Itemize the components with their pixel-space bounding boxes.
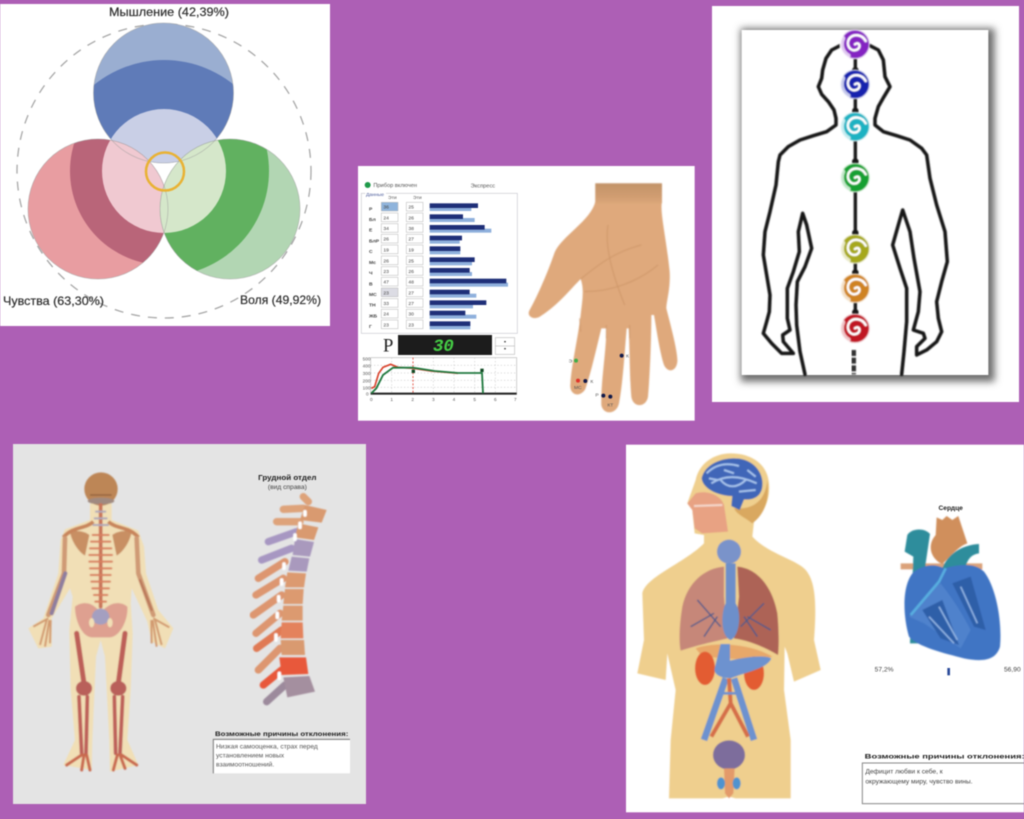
row labels: С — [369, 249, 373, 255]
heading: possible causes: Возможные причины отклонения: — [865, 753, 1024, 760]
text box: causes: установлением новых — [216, 753, 285, 760]
leg bones — [67, 633, 137, 770]
line chart: 5 — [473, 397, 476, 402]
bladder — [713, 740, 745, 770]
chakra: heart — [841, 163, 869, 192]
input values: 25 — [408, 205, 414, 211]
text box: causes: Низкая самооценка, страх перед — [216, 744, 318, 751]
value inputs — [381, 202, 423, 329]
brain — [702, 458, 762, 510]
line chart — [363, 356, 517, 402]
row labels: Р — [369, 206, 373, 212]
panel: device software and hand — [358, 166, 695, 421]
reproductive organs — [724, 768, 735, 798]
status indicator: Прибор включен — [373, 183, 417, 189]
line chart: 400 — [363, 363, 371, 368]
circle: feelings (red) — [28, 138, 164, 280]
input values: 26 — [383, 258, 389, 264]
shoulder girdle — [70, 531, 132, 556]
left percent: 57,2% — [875, 667, 894, 674]
pancreas and vessels — [715, 644, 771, 678]
input values: 26 — [408, 215, 414, 221]
body outline — [763, 46, 947, 374]
input values: 23 — [408, 322, 414, 328]
text box: causes: Дефицит любви к себе, к — [865, 767, 943, 775]
dark bars — [430, 203, 506, 326]
right percent: 56,90 — [1004, 667, 1021, 674]
input values: 36 — [383, 205, 389, 211]
heading: possible causes: Возможные причины отклонения: — [215, 731, 348, 738]
panel: internal organs and heart — [626, 445, 1024, 812]
group box with bars — [361, 191, 517, 333]
row labels: Бл — [369, 217, 376, 223]
hair shading — [734, 480, 768, 523]
line chart: 0 — [370, 397, 373, 402]
chakra: sacral — [841, 274, 869, 303]
label: feelings: Чувства (63,30%) — [3, 294, 104, 308]
chakra: third eye — [841, 70, 869, 99]
spine and ribs — [89, 505, 112, 607]
channel letter: Р — [383, 336, 393, 357]
centre marker — [947, 668, 950, 675]
line chart: 4 — [453, 397, 456, 402]
image shadow — [741, 28, 995, 382]
hand illustration — [529, 183, 677, 412]
text box: causes — [213, 739, 350, 773]
line chart: 3 — [432, 397, 435, 402]
kidneys — [695, 652, 715, 685]
panel: skeleton and thoracic spine — [13, 444, 366, 804]
chakra spirals — [841, 30, 869, 343]
chakra: root — [841, 314, 869, 343]
heading: thoracic section: Грудной отдел — [258, 474, 316, 482]
row labels: ЖБ — [368, 313, 378, 319]
row labels: Е — [369, 228, 373, 234]
panel: chakra body figure — [712, 6, 1019, 402]
line chart: 200 — [363, 378, 371, 383]
chakra: throat — [841, 112, 869, 141]
input values: 19 — [383, 247, 389, 253]
row labels: Мс — [369, 260, 376, 266]
body silhouette — [637, 453, 821, 798]
input values: 27 — [408, 301, 414, 307]
line chart: 100 — [363, 385, 371, 390]
input values: 24 — [383, 312, 389, 318]
text box: causes: взаимоотношений. — [216, 761, 274, 769]
face cross-section — [687, 492, 728, 533]
chakra: solar plexus — [841, 235, 869, 263]
pelvis — [75, 603, 127, 637]
heart illustration — [901, 516, 1000, 660]
group box with bars: Эти — [413, 195, 422, 201]
row labels: МС — [369, 292, 377, 298]
measuring points: МС — [574, 385, 582, 391]
row labels: ТН — [369, 303, 376, 309]
input values: 27 — [408, 290, 414, 296]
input values: 23 — [383, 269, 389, 275]
central channel — [852, 58, 859, 374]
input values: 26 — [383, 237, 389, 243]
row labels — [368, 206, 380, 330]
line chart: 0 — [366, 392, 369, 397]
label: thinking: Мышление (42,39%) — [109, 5, 229, 19]
measuring points: Э — [569, 358, 573, 364]
circle: thinking (blue) — [93, 22, 234, 164]
text box: causes: окружающему миру, чувство вины. — [865, 778, 973, 785]
measuring points: Р — [595, 393, 599, 399]
chakra: crown — [841, 30, 869, 59]
spinous processes — [253, 497, 308, 702]
label: will: Воля (49,92%) — [240, 293, 321, 307]
group box with bars: Эти — [388, 195, 397, 201]
trachea and heart area — [722, 563, 739, 640]
input values: 34 — [383, 226, 389, 232]
thyroid and trachea — [717, 540, 741, 564]
measuring points: К — [590, 379, 593, 385]
measuring points — [569, 353, 629, 408]
input values: 27 — [408, 237, 414, 243]
measuring points: КТ — [607, 402, 613, 408]
stepper buttons — [495, 338, 515, 354]
input values: 26 — [408, 269, 414, 275]
light bars — [430, 207, 508, 329]
input values: 30 — [408, 312, 414, 318]
digital display: 30 — [433, 338, 454, 357]
vertebral bodies — [279, 505, 327, 697]
input values: 23 — [383, 322, 389, 328]
heading: thoracic section — [258, 474, 316, 491]
input values: 19 — [408, 247, 414, 253]
skull — [84, 472, 118, 506]
line chart: 500 — [363, 356, 371, 361]
input values — [383, 205, 414, 328]
status indicator: Экспресс — [471, 184, 495, 190]
skeleton figure — [28, 472, 173, 772]
circle outlines — [28, 23, 300, 279]
input values: 33 — [383, 301, 389, 307]
panel: three-circle diagram — [0, 4, 330, 326]
circle: will (green) — [160, 138, 300, 280]
liver band — [696, 645, 772, 661]
input values: 24 — [383, 215, 389, 221]
input values: 25 — [408, 258, 414, 264]
line chart: 7 — [514, 397, 517, 402]
row labels: В — [369, 281, 373, 287]
body silhouette — [28, 503, 173, 772]
input values: 23 — [383, 290, 389, 296]
input values: 38 — [408, 226, 414, 232]
row labels: Ч — [369, 271, 373, 277]
row labels: БлР — [369, 238, 380, 244]
line chart: 2 — [411, 397, 414, 402]
arm bones — [48, 538, 153, 615]
orange centre ring — [146, 152, 184, 190]
dashed outer circle — [17, 24, 311, 318]
lungs — [680, 567, 727, 651]
heading: thoracic section: (вид справа) — [268, 484, 307, 491]
input values: 47 — [383, 280, 389, 286]
text box: causes — [862, 763, 1024, 804]
thoracic spine illustration — [253, 497, 327, 702]
hand bones — [33, 618, 169, 647]
foramen gaps — [276, 512, 305, 678]
row labels: Г — [369, 324, 372, 330]
input values: 48 — [408, 280, 414, 286]
line chart: 300 — [363, 371, 371, 376]
torso figure — [637, 453, 821, 798]
heading: heart: Сердце — [938, 505, 963, 512]
line chart: 1 — [390, 397, 393, 402]
measuring points: К — [626, 353, 629, 359]
digital display — [398, 335, 492, 357]
status indicator — [365, 182, 495, 190]
line chart: 6 — [494, 397, 497, 402]
group box with bars: Данные — [366, 192, 384, 198]
